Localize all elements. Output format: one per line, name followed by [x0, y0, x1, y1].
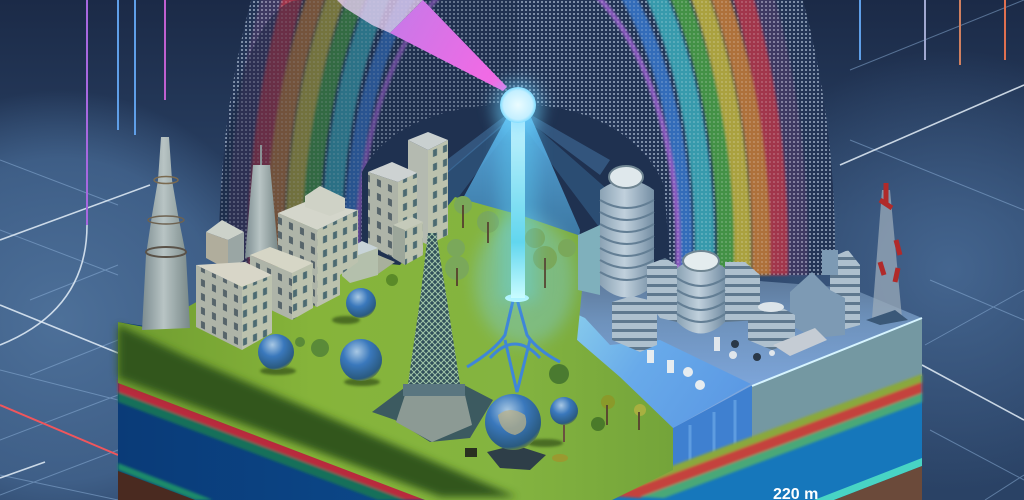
right rainbow stripe: [612, 374, 922, 498]
rainbow bands: [238, 0, 798, 275]
dome block: [748, 302, 795, 350]
tower wings: [372, 385, 493, 442]
bright grid lines: [0, 85, 1024, 478]
left rainbow stripe: [118, 379, 441, 500]
small vehicles: [714, 337, 775, 361]
beam base glow: [505, 294, 529, 302]
light beam: [499, 112, 537, 302]
small box building: [206, 220, 244, 270]
right bottom stripe: [814, 458, 922, 500]
plate bright edge: [752, 318, 922, 386]
back mid building: [368, 162, 417, 260]
shaded grass side: [118, 325, 517, 497]
wireframe blue tower: [467, 292, 560, 392]
front rib block: [612, 296, 657, 352]
tower upper lattice: [408, 233, 460, 384]
left base soil: [118, 471, 195, 500]
left ribbed block behind cylinder: [578, 225, 600, 295]
tall right blocks: [790, 250, 860, 338]
trees: [295, 196, 646, 431]
low block: [342, 241, 395, 283]
small figures on river bank: [647, 350, 705, 390]
dot overlay: [219, 0, 835, 275]
tower lower body: [396, 395, 472, 442]
tower cone: [245, 145, 278, 258]
magenta light wedge: [390, 0, 507, 91]
small props near globe: [465, 448, 568, 462]
light cone rays: [420, 112, 625, 290]
globe shadows: [260, 316, 563, 447]
red telecom mast: [866, 183, 908, 325]
rib block A: [647, 258, 677, 322]
big ribbed cylinder tower: [600, 166, 654, 298]
waterfall: [673, 384, 752, 472]
large globe on stand: [485, 394, 546, 470]
slab block: [773, 328, 827, 356]
ribbed cylinder two: [677, 251, 725, 334]
right face upper texture: [751, 318, 922, 440]
front box building: [196, 262, 272, 350]
island left face: [118, 322, 640, 500]
small annex building: [393, 217, 423, 265]
grass surface: [118, 197, 673, 500]
river: [535, 295, 751, 428]
back tall building: [408, 132, 448, 245]
light wash at top of rainbow: [337, 0, 423, 33]
inner dark dome: [362, 104, 672, 290]
rainbow dome: [219, 0, 835, 275]
right base soil: [834, 466, 922, 500]
mesh dome: [219, 0, 835, 275]
blue plate surface: [525, 268, 922, 428]
globes: [258, 288, 578, 442]
island right face: [600, 318, 922, 500]
tower platform: [403, 384, 465, 396]
left side shading: [219, 0, 518, 275]
big building: [278, 186, 358, 307]
second box building: [250, 247, 313, 320]
big eiffel tower: [372, 233, 493, 442]
glowing orb: [493, 80, 543, 130]
tower left: [142, 137, 190, 330]
glow on grass by beam: [475, 215, 575, 345]
rib block back right: [725, 262, 760, 322]
